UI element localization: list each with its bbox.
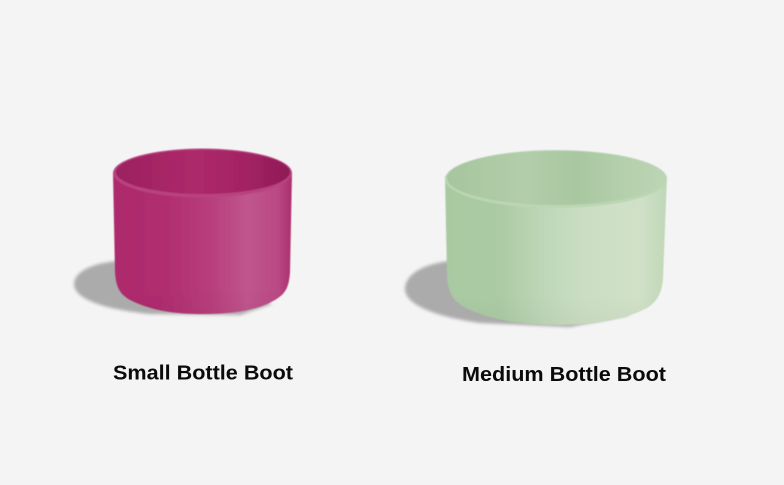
- boot body shading: pink: [113, 172, 292, 314]
- label: small bottle boot: Small Bottle Boot: [113, 362, 293, 384]
- boot body shading: green: [445, 176, 667, 325]
- shadow: medium boot: [405, 261, 630, 327]
- boot interior: green: [447, 151, 665, 205]
- boot rim: pink: [113, 148, 292, 198]
- boot shape: pink: [113, 148, 292, 314]
- label: medium bottle boot: Medium Bottle Boot: [462, 364, 666, 386]
- shadow: small boot: [74, 261, 272, 315]
- small bottle boot product: [74, 148, 292, 315]
- medium bottle boot product: [405, 150, 667, 327]
- boot body: green: [445, 176, 667, 325]
- boot interior: pink: [116, 150, 290, 194]
- boot shape: green: [445, 150, 667, 325]
- boot rim: green: [445, 150, 667, 208]
- boot body: pink: [113, 172, 292, 314]
